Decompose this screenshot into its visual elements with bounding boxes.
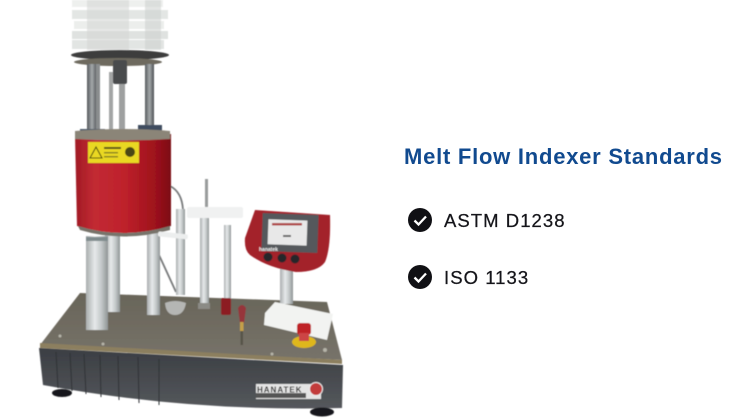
base plate bbox=[40, 293, 342, 364]
brand badge bbox=[256, 382, 322, 399]
tool: ladle bbox=[158, 209, 188, 315]
icon: check mark bbox=[408, 265, 432, 289]
brand badge: HANATEK bbox=[257, 386, 303, 394]
guide rods bbox=[80, 60, 162, 135]
base front bbox=[39, 348, 343, 409]
support columns bbox=[86, 232, 160, 330]
list item: ISO 1133 bbox=[408, 265, 529, 289]
label: ISO 1133: ISO 1133 bbox=[444, 267, 529, 288]
list item: ASTM D1238 bbox=[408, 208, 566, 232]
tool: glass tube bbox=[221, 225, 231, 315]
control panel: hanatek bbox=[259, 247, 278, 253]
icon: melt flow indexer machine bbox=[39, 0, 343, 416]
warning label bbox=[88, 142, 139, 163]
weights stack bbox=[72, 0, 168, 50]
white box bbox=[264, 302, 333, 340]
feet bbox=[52, 389, 334, 416]
title: Melt Flow Indexer Standards bbox=[404, 144, 723, 169]
tool: tamping rod bbox=[187, 179, 243, 309]
control panel bbox=[245, 210, 330, 272]
hose bbox=[159, 186, 183, 292]
top plate bbox=[71, 50, 169, 66]
display stand bbox=[280, 268, 293, 304]
red heating cylinder bbox=[75, 129, 171, 236]
icon: check mark bbox=[408, 208, 432, 232]
tool: screwdriver bbox=[238, 305, 246, 345]
emergency stop button bbox=[292, 323, 316, 348]
label: ASTM D1238: ASTM D1238 bbox=[444, 210, 566, 231]
